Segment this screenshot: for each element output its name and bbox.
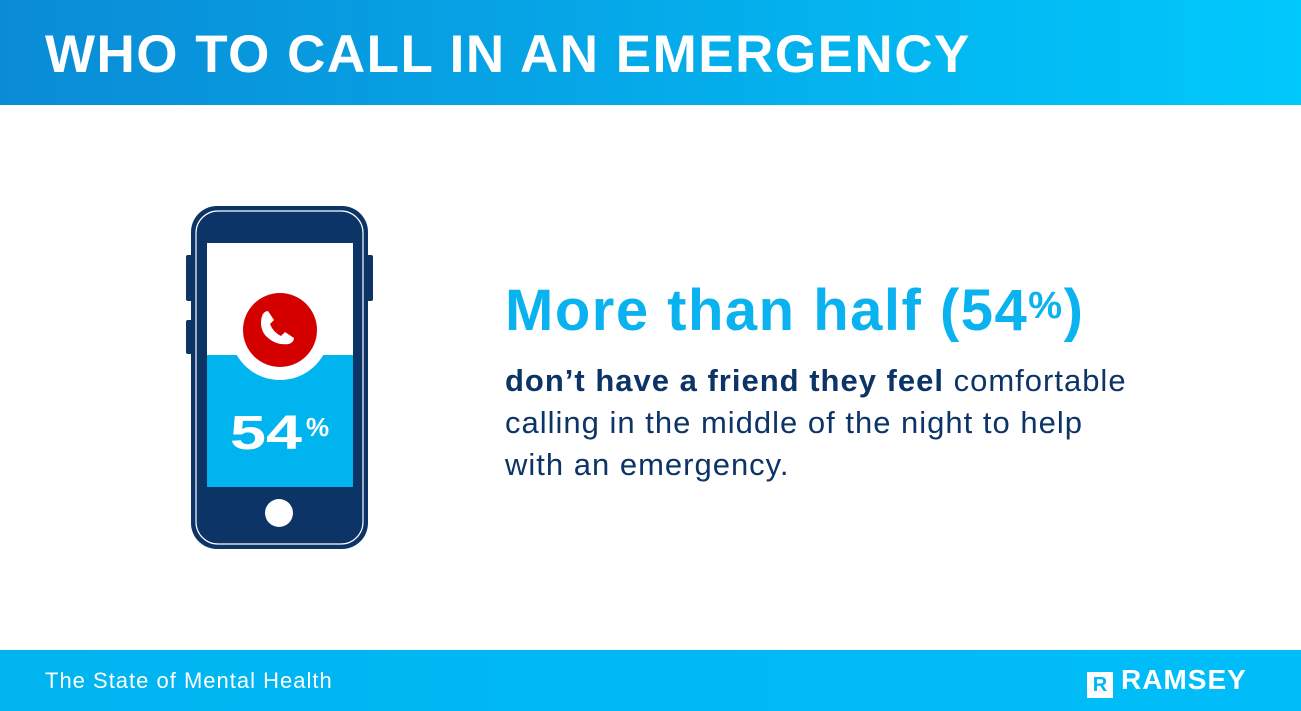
icon: phone with 54% (186, 206, 373, 549)
logo: Ramsey: R (1093, 674, 1107, 696)
icon: phone with 54%: % (306, 412, 329, 442)
headline stat: More than half (54%) (505, 278, 1084, 343)
footer (0, 650, 1301, 711)
header banner (0, 0, 1301, 105)
logo: Ramsey: RAMSEY (1121, 664, 1247, 695)
icon: phone with 54%: 54 (230, 407, 302, 460)
title: WHO TO CALL IN AN EMERGENCY (45, 25, 971, 84)
body text: don’t have a friend they feel comfortable calling in the middle of the night to help with an emergency. (505, 363, 1127, 482)
footer text: The State of Mental Health (45, 668, 333, 693)
